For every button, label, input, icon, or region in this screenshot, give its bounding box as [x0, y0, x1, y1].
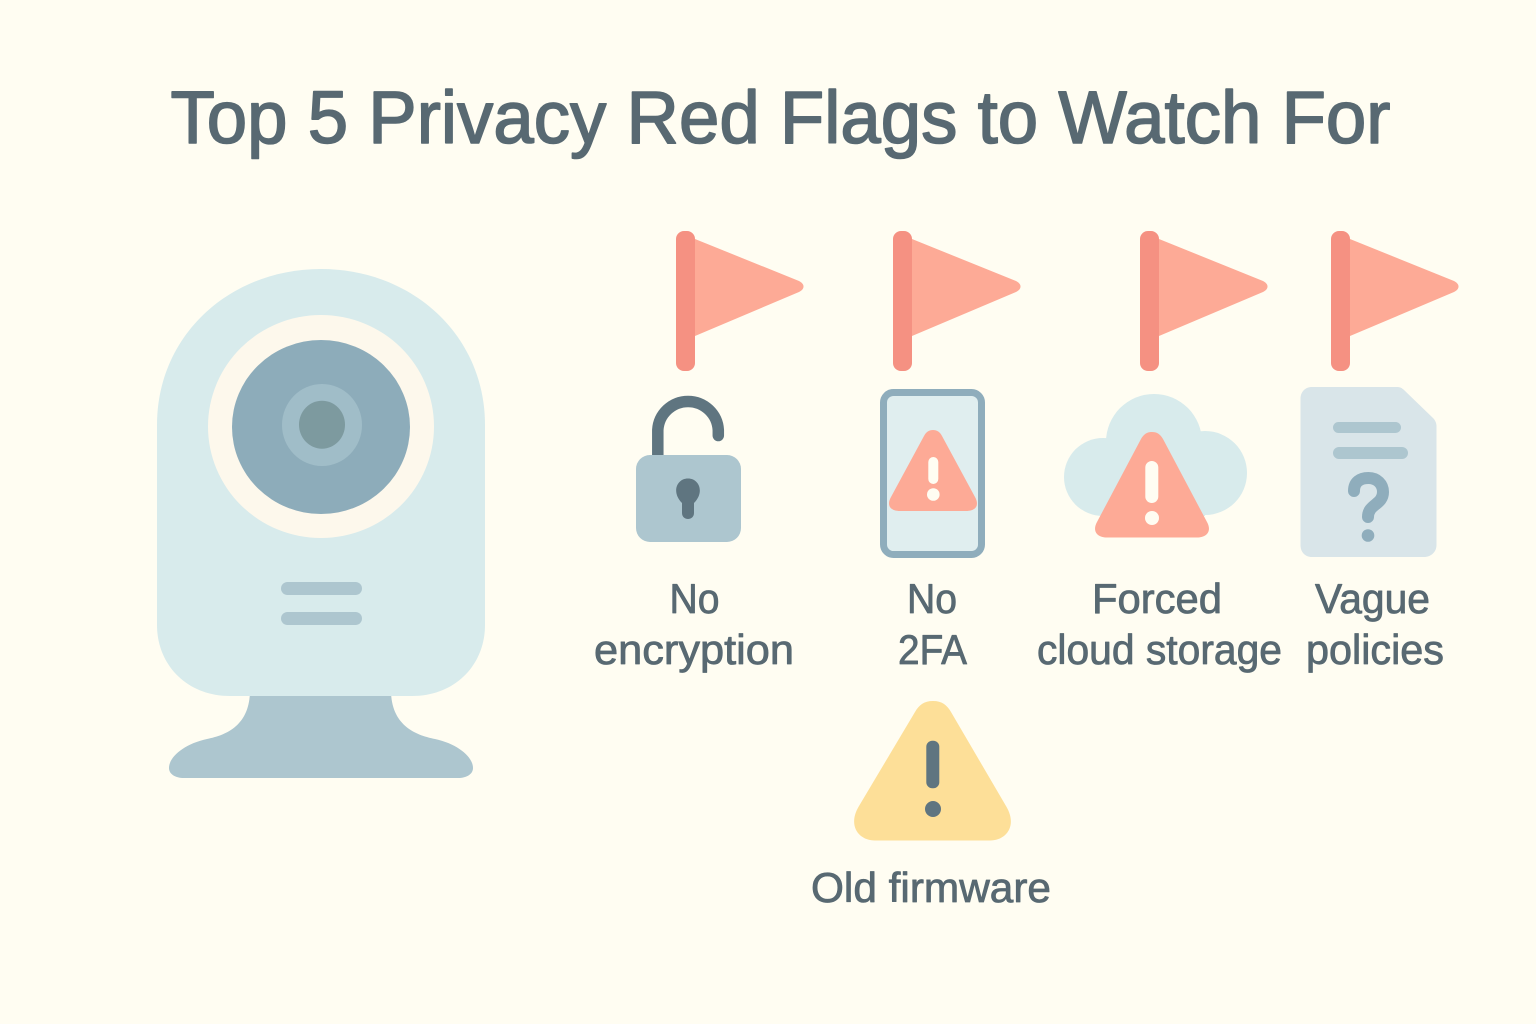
icon: document with question mark [1300, 387, 1436, 557]
camera body [157, 269, 485, 696]
label: forced cloud storage: cloud storage [1037, 626, 1282, 673]
label: old firmware: Old firmware [811, 864, 1051, 911]
label: vague policies [1306, 575, 1444, 673]
icon: cloud with warning [1064, 394, 1247, 538]
label: forced cloud storage: Forced [1092, 575, 1222, 622]
icon: phone with warning [884, 392, 982, 554]
title: Top 5 Privacy Red Flags to Watch For [170, 76, 1390, 159]
flag 2 [893, 231, 1020, 371]
label: no 2FA: No [907, 575, 957, 622]
icon: yellow warning triangle [854, 701, 1011, 840]
flag 4 [1331, 231, 1458, 371]
label: vague policies: Vague [1315, 575, 1430, 622]
flag 1 [676, 231, 804, 371]
icon: open padlock [636, 401, 741, 542]
label: no encryption: encryption [594, 626, 794, 673]
speaker lines [281, 582, 362, 625]
label: no encryption: No [670, 575, 720, 622]
label: no 2FA [898, 575, 967, 673]
flag 3 [1140, 231, 1268, 371]
camera stand [169, 690, 473, 778]
label: no 2FA: 2FA [898, 626, 967, 673]
lens ring [208, 315, 434, 538]
icon: security camera [157, 269, 485, 778]
label: no encryption [594, 575, 794, 673]
label: vague policies: policies [1306, 626, 1444, 673]
lens [232, 340, 410, 514]
label: forced cloud storage [1037, 575, 1282, 673]
